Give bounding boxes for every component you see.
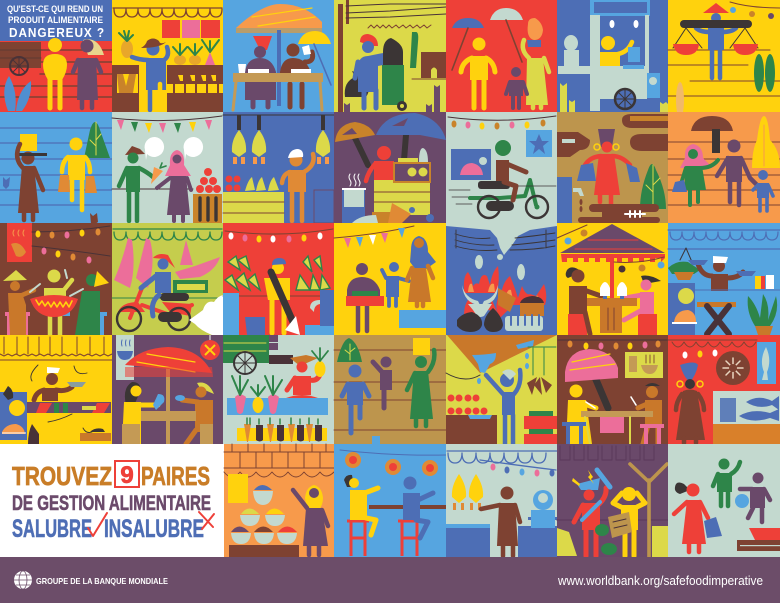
blue wall bbox=[320, 290, 334, 326]
baton and shock bbox=[572, 470, 610, 520]
tan tree post bbox=[630, 464, 667, 557]
panel: garbage bin by pole bbox=[334, 0, 446, 112]
bananas bbox=[245, 177, 279, 191]
table bbox=[27, 402, 111, 413]
yellow small parasol bbox=[298, 31, 331, 85]
crate with fish bbox=[193, 194, 222, 223]
blue rug bbox=[399, 310, 446, 328]
red cook bbox=[366, 146, 408, 181]
carrot bbox=[151, 163, 166, 184]
hanging plant bbox=[668, 248, 700, 280]
panel: butcher scale bbox=[446, 444, 558, 558]
red check mark bbox=[88, 513, 107, 536]
panel: bar counter drinkers bbox=[334, 444, 446, 558]
awning scallops bbox=[113, 8, 222, 17]
pole bbox=[166, 368, 170, 444]
tree bbox=[640, 164, 666, 209]
cats bbox=[3, 177, 98, 224]
headline: trouvez 9 paires bbox=[12, 461, 210, 491]
apples bbox=[448, 394, 488, 414]
blue drinker bbox=[403, 476, 433, 538]
blue cup and tray bbox=[623, 47, 644, 69]
blue seller bbox=[132, 38, 168, 110]
orange bench bbox=[80, 433, 111, 441]
panel: roof leak over produce bbox=[446, 335, 557, 444]
red bowl bbox=[30, 295, 78, 317]
green bush bbox=[337, 338, 362, 362]
green cart bbox=[223, 335, 293, 374]
chickens bbox=[452, 474, 483, 510]
brown butcher bbox=[481, 486, 520, 556]
speech bubbles bbox=[145, 137, 203, 160]
purple woman with yellow scarf bbox=[293, 485, 328, 555]
blue ball bbox=[735, 494, 749, 508]
red basket bbox=[749, 528, 780, 540]
panel: burning waste bbox=[446, 223, 557, 335]
motorcycle bbox=[470, 180, 548, 218]
panel: restaurant with pink parasol bbox=[557, 335, 668, 444]
green diner bbox=[75, 271, 109, 335]
blue tray bbox=[468, 415, 492, 419]
broken crates bbox=[352, 203, 434, 223]
fish bones bbox=[625, 211, 645, 217]
chef bbox=[34, 367, 72, 401]
sage sign with bowl bbox=[116, 335, 134, 380]
wires bbox=[455, 230, 555, 250]
dark sack bbox=[271, 272, 293, 322]
brown person carrying basket bbox=[17, 144, 47, 220]
blue fish sign bbox=[757, 342, 776, 384]
green woman bbox=[407, 350, 434, 426]
purple person bbox=[373, 356, 392, 408]
rider bbox=[495, 140, 526, 200]
panel: motorcycle courier bbox=[446, 112, 557, 223]
yellow vendor bbox=[600, 36, 632, 66]
stools bbox=[5, 312, 107, 335]
apple pyramid bbox=[196, 168, 221, 193]
diner in conical hat bbox=[3, 270, 34, 335]
orange frame and fruit bbox=[394, 148, 430, 182]
woman with red turban bbox=[245, 36, 276, 107]
sage parasol bbox=[490, 8, 523, 62]
wire and hanging peppers bbox=[446, 347, 556, 395]
blue counters bbox=[446, 524, 557, 558]
apples bbox=[226, 176, 240, 192]
panel: pineapple seller bbox=[112, 0, 223, 112]
garbage bag bbox=[345, 71, 369, 97]
blue child bbox=[382, 262, 409, 306]
pineapple bbox=[312, 348, 328, 377]
tree bbox=[84, 122, 110, 158]
number nine box bbox=[115, 461, 139, 489]
panel: scooter through meat stand bbox=[112, 223, 223, 335]
orange seller bbox=[282, 149, 314, 221]
speed lines bbox=[449, 186, 556, 204]
panel: washing bananas bbox=[223, 223, 334, 335]
blue sliver bbox=[372, 436, 380, 444]
pink parasol bbox=[565, 349, 618, 382]
red seller bbox=[286, 355, 321, 406]
panel: blue man and green woman bbox=[334, 335, 446, 444]
awning scallops bbox=[668, 230, 780, 249]
orange base bbox=[713, 424, 780, 444]
X table bbox=[697, 302, 736, 334]
string of bulbs bbox=[32, 226, 110, 264]
flame highlights bbox=[468, 284, 540, 302]
green woman with pink shawl bbox=[680, 144, 718, 205]
dark parasol pole bbox=[594, 375, 608, 408]
red officer bbox=[574, 478, 606, 556]
sage stand bbox=[558, 15, 649, 111]
solar roof bbox=[590, 0, 650, 16]
website: www.worldbank.org/safefoodimperative bbox=[557, 574, 763, 588]
panel: taco stand diners bbox=[0, 223, 112, 335]
panel: title and two people bbox=[0, 0, 112, 112]
left counter bbox=[112, 65, 139, 112]
light bulbs bbox=[610, 20, 638, 28]
awning scallops bbox=[113, 229, 222, 240]
star sign bbox=[526, 130, 552, 157]
pink meat bbox=[114, 238, 220, 288]
yellow worker with sack bbox=[264, 258, 290, 333]
panel: woman with dirty water bbox=[557, 112, 668, 223]
table bbox=[141, 411, 196, 421]
tan plant bbox=[676, 82, 684, 118]
headline: trouvez 9 paires: PAIRES bbox=[141, 461, 210, 491]
green leaves bbox=[595, 524, 617, 555]
panel: spice bowls bbox=[224, 444, 334, 558]
smoke plume bbox=[446, 223, 557, 260]
smoke puffs bbox=[475, 255, 525, 280]
mop bbox=[285, 316, 300, 335]
yellow shopper bbox=[62, 138, 90, 210]
blue shelf with sun and chicken bbox=[0, 386, 27, 440]
right counter bbox=[167, 65, 223, 112]
cart bbox=[0, 42, 41, 75]
yellow basket bbox=[20, 134, 37, 151]
panel: family under parasols bbox=[446, 0, 557, 112]
stools bbox=[122, 424, 213, 444]
panel: cook and messy floor bbox=[334, 112, 446, 223]
sage fish counter bbox=[713, 391, 780, 424]
spice pyramid bbox=[231, 485, 297, 544]
man in brown bbox=[280, 44, 313, 107]
blue carrier bbox=[696, 3, 736, 78]
green child bbox=[713, 458, 740, 506]
bulbs bbox=[490, 464, 554, 476]
fence bbox=[0, 337, 112, 360]
plate bbox=[67, 382, 86, 387]
woman with pink hijab bbox=[157, 150, 191, 221]
panel: chef with flies bbox=[0, 335, 112, 444]
plates bbox=[688, 260, 756, 276]
panel: hanging chickens bbox=[223, 112, 334, 223]
counter bbox=[369, 505, 446, 509]
World Bank name: GROUPE DE LA BANQUE MONDIALE bbox=[36, 576, 168, 586]
brown table bbox=[737, 540, 780, 551]
blue bucket bbox=[245, 317, 265, 335]
purple person with shawl bbox=[73, 39, 104, 108]
exhaust smoke bbox=[189, 295, 223, 335]
headline: salubre insalubre: SALUBRE bbox=[12, 515, 92, 543]
yellow diner bbox=[44, 270, 72, 335]
string of bulbs bbox=[225, 229, 333, 242]
rug vegetables bbox=[232, 376, 282, 414]
red basket bbox=[346, 291, 384, 306]
lantern bbox=[200, 335, 220, 360]
yellow basket bbox=[413, 338, 430, 355]
title text: PRODUIT ALIMENTAIRE bbox=[8, 15, 103, 26]
red sign with taco bbox=[7, 223, 32, 262]
panel: police and sign bbox=[557, 444, 668, 558]
scallops bbox=[557, 446, 668, 520]
title text bbox=[7, 4, 105, 40]
blue parasol bbox=[452, 18, 484, 70]
plant bbox=[4, 76, 31, 111]
soup sign bbox=[625, 352, 663, 378]
lamp string bbox=[557, 225, 664, 272]
headline: trouvez 9 paires: TROUVEZ bbox=[12, 461, 112, 491]
utility pole and wires bbox=[338, 0, 446, 112]
headline: salubre insalubre bbox=[12, 512, 214, 543]
hanging chickens bbox=[232, 115, 330, 164]
garbage bags bbox=[457, 308, 503, 332]
purple parasol bbox=[560, 224, 665, 262]
blue man bbox=[486, 369, 520, 444]
yellow man bbox=[461, 38, 495, 108]
scales bbox=[673, 28, 758, 55]
tap bbox=[310, 300, 320, 312]
red crates bbox=[524, 411, 557, 444]
panel: family at vegetable basket bbox=[334, 223, 446, 335]
blue rug bbox=[227, 398, 328, 415]
yellow diner bbox=[566, 384, 596, 444]
brown woman with blue turban bbox=[676, 362, 705, 443]
forks bbox=[586, 397, 636, 408]
earrings and bags bbox=[577, 144, 640, 182]
potted plant bbox=[748, 294, 777, 335]
number nine box: 9 bbox=[120, 462, 134, 489]
panel: family with parasol bbox=[668, 112, 780, 223]
bunting bbox=[112, 116, 222, 133]
red cross bbox=[199, 512, 214, 529]
chicken freezer box bbox=[451, 149, 491, 180]
stools bbox=[568, 314, 657, 335]
table bbox=[587, 298, 637, 333]
yellow tree bbox=[752, 116, 780, 168]
forks and cup bbox=[30, 270, 83, 296]
cacti bbox=[754, 54, 775, 92]
brown parasol bbox=[691, 116, 733, 153]
orange flowers bbox=[345, 452, 438, 476]
brick wall bbox=[224, 444, 334, 477]
rider bbox=[141, 254, 175, 316]
yellow person covering ears bbox=[613, 487, 645, 556]
yellow counter bbox=[374, 180, 430, 215]
stacked crate bbox=[314, 190, 334, 223]
panel: white headline background bbox=[0, 444, 224, 558]
cats bbox=[344, 85, 440, 112]
woman in yellow bbox=[122, 382, 158, 444]
orange woman with blue hijab bbox=[407, 236, 436, 306]
pole bbox=[610, 258, 614, 304]
towels bbox=[162, 20, 220, 38]
bull head bbox=[462, 285, 498, 317]
cats bbox=[560, 83, 668, 112]
panel: waiter and X table bbox=[668, 223, 780, 335]
flies with trails bbox=[31, 365, 92, 432]
dark posts bbox=[355, 135, 406, 165]
headline: salubre insalubre: INSALUBRE bbox=[104, 515, 204, 543]
World Bank globe logo bbox=[14, 571, 32, 589]
orange diner bbox=[638, 383, 662, 444]
brown stains bbox=[557, 114, 668, 157]
scallop rail bbox=[447, 451, 557, 470]
purple man bbox=[717, 140, 758, 205]
panel: diners under orange parasol bbox=[223, 0, 334, 112]
dial wheel bbox=[716, 351, 750, 385]
yellow drinker bbox=[344, 475, 378, 535]
title background bbox=[0, 0, 112, 41]
yellow mat bbox=[237, 428, 327, 441]
woman with pot on head bbox=[523, 18, 549, 108]
blue parasol bbox=[376, 113, 446, 140]
pot and steam bbox=[342, 174, 366, 223]
purple person with basket bbox=[347, 263, 380, 331]
light blue tiles bbox=[223, 293, 334, 335]
pink person bbox=[624, 276, 661, 320]
green man bbox=[119, 146, 153, 221]
panel: fish stand bbox=[668, 335, 780, 444]
sage crate bbox=[505, 315, 543, 331]
brown person bbox=[566, 267, 601, 334]
orange parasol bbox=[236, 4, 322, 33]
earrings bbox=[677, 381, 703, 387]
string of bulbs bbox=[558, 340, 668, 350]
brown crate bbox=[446, 415, 497, 444]
string of bulbs bbox=[448, 116, 556, 130]
bananas left bbox=[225, 256, 260, 290]
panel: vegetable seller on rug bbox=[223, 335, 334, 444]
cart wheel bbox=[615, 89, 635, 109]
brown box bbox=[520, 296, 544, 316]
panel: carrot buyer conversation bbox=[112, 112, 223, 223]
leaks bbox=[472, 340, 534, 384]
red stools bbox=[347, 521, 421, 556]
blue wall and tap bbox=[557, 177, 584, 223]
string of bulbs bbox=[730, 2, 780, 19]
bunting bbox=[334, 226, 414, 248]
shoulder pole bbox=[680, 20, 752, 28]
panel: street food cart bbox=[557, 0, 668, 112]
blue child bbox=[753, 170, 773, 211]
yellow counter bbox=[223, 192, 284, 223]
purple child bbox=[740, 472, 770, 522]
blue man bbox=[342, 364, 369, 433]
pole bbox=[277, 30, 281, 106]
ice creams bbox=[600, 282, 627, 299]
fires bbox=[464, 266, 546, 318]
yellow cloth bbox=[228, 474, 248, 503]
carrots row bbox=[244, 418, 322, 442]
lime signs bbox=[557, 526, 668, 558]
green bin bbox=[382, 32, 418, 111]
orange parasol bbox=[335, 122, 375, 142]
waiter bbox=[698, 256, 743, 291]
blue shelf with chicken bbox=[668, 283, 697, 335]
purple child bbox=[506, 67, 527, 108]
plates bbox=[153, 394, 185, 410]
puddle bbox=[578, 204, 660, 223]
panel: pole carrier with scales bbox=[668, 0, 780, 118]
gate building bbox=[421, 52, 446, 78]
title text: DANGEREUX ? bbox=[9, 25, 105, 40]
ochre roof bbox=[447, 335, 557, 373]
yellow person bbox=[43, 38, 67, 108]
red parasol bbox=[125, 347, 213, 377]
orange man bbox=[182, 382, 214, 444]
blue man bbox=[355, 34, 388, 108]
panel: fish market parasol bbox=[112, 335, 223, 444]
table bbox=[233, 64, 323, 110]
blue bag bbox=[704, 517, 722, 538]
footer band bbox=[0, 557, 780, 603]
snow box bbox=[647, 73, 660, 98]
green crate bbox=[173, 280, 208, 293]
brown shelf bbox=[229, 545, 299, 558]
sage chef bbox=[564, 35, 579, 66]
line bbox=[412, 78, 446, 80]
red woman bbox=[674, 483, 708, 552]
orange crate bbox=[498, 288, 516, 312]
panel: basket carrier and shopper bbox=[0, 112, 112, 224]
tan sign bbox=[608, 512, 632, 538]
title text: QU'EST-CE QUI REND UN bbox=[7, 4, 103, 15]
blue bag bbox=[672, 180, 687, 192]
fringe and bulbs bbox=[668, 340, 757, 358]
bananas right bbox=[296, 256, 330, 290]
red woman bbox=[585, 129, 630, 205]
bottles bbox=[755, 275, 774, 289]
pineapples and radish bbox=[119, 31, 219, 65]
scooter bbox=[117, 288, 192, 331]
orange bags bbox=[58, 175, 97, 193]
headline: de gestion alimentaire: DE GESTION ALIMENTAIRE bbox=[12, 492, 211, 515]
table bbox=[581, 411, 653, 444]
scale bbox=[528, 490, 558, 528]
stools bbox=[562, 422, 664, 444]
rat and cat bbox=[28, 424, 105, 444]
panel: ice cream stand bbox=[557, 223, 668, 335]
panel: red woman and children bbox=[668, 444, 780, 558]
